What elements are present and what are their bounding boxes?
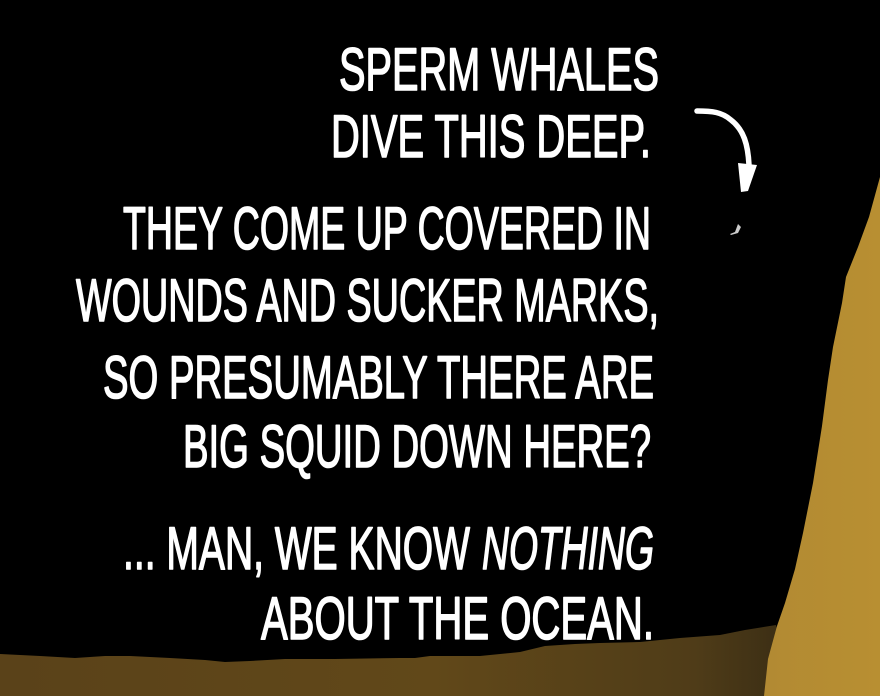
text block: we know nothing: NOTHING — [482, 515, 654, 582]
text block: sperm whales dive: DIVE THIS DEEP. — [331, 103, 651, 170]
text block: we know nothing: ... MAN, WE KNOW — [123, 515, 470, 582]
ocean floor — [0, 625, 790, 696]
text block: we know nothing — [123, 515, 654, 652]
seabed slope wall — [764, 177, 880, 696]
text block: we know nothing: ABOUT THE OCEAN. — [261, 585, 654, 652]
text block: sperm whales dive — [331, 36, 659, 170]
text block: sperm whales dive: SPERM WHALES — [339, 36, 659, 103]
arrow pointing down to the whale — [697, 111, 757, 192]
icon: tiny sperm whale — [730, 224, 741, 235]
text block: wounds and sucker marks — [76, 195, 659, 480]
